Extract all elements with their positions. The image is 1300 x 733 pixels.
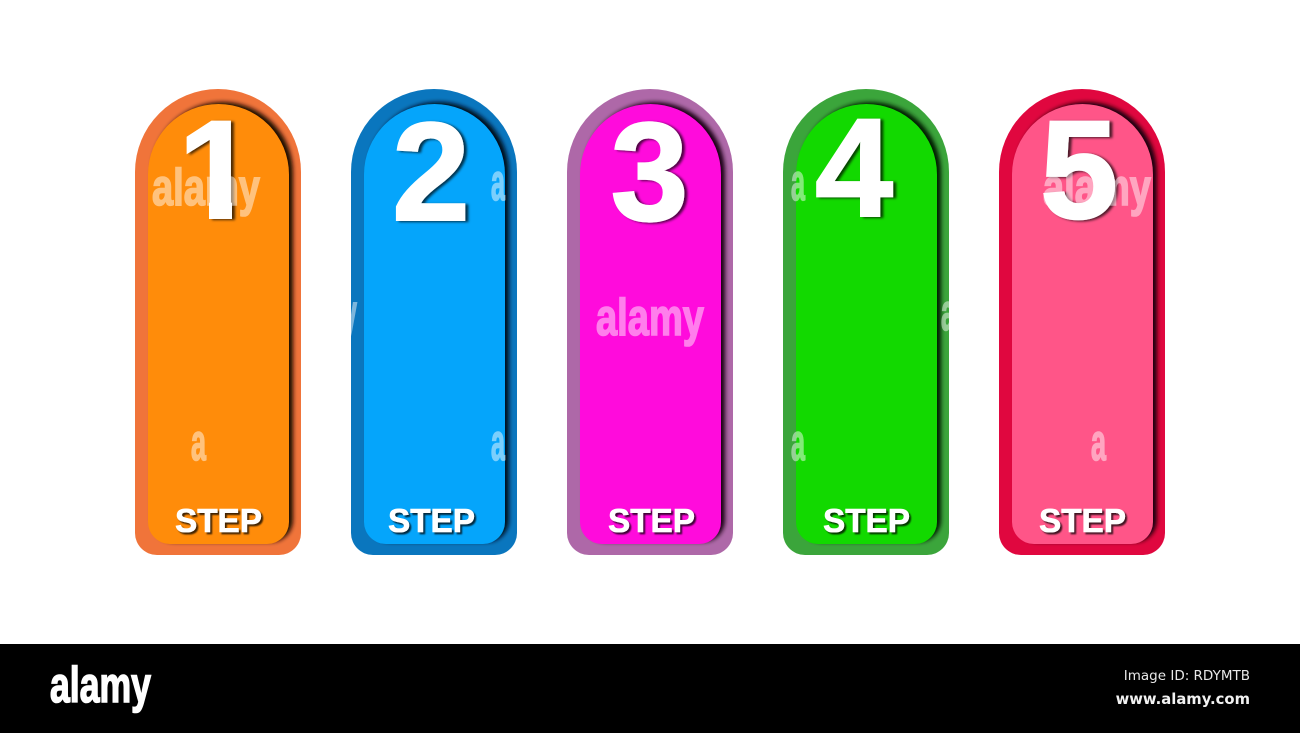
panel: step 2 <box>351 89 517 555</box>
footer logo: alamy <box>50 657 151 713</box>
watermarks: a <box>491 414 506 472</box>
step 1 label: STEP <box>175 502 262 539</box>
step 5 label: STEP <box>1039 502 1126 539</box>
panel: step 4 <box>783 89 949 555</box>
number 2: 2 <box>392 93 470 250</box>
step 2 label: STEP <box>388 502 475 539</box>
step 4 card <box>783 89 949 555</box>
watermarks: a <box>791 414 806 472</box>
step 3 label: STEP <box>608 502 695 539</box>
panel: step 3 <box>567 89 733 555</box>
number 4: 4 <box>815 89 893 246</box>
watermarks: a <box>791 154 806 212</box>
number 3: 3 <box>611 93 688 250</box>
watermarks: alamy <box>152 159 260 217</box>
image id: Image ID: RDYMTB <box>1124 668 1250 684</box>
step 5 card <box>999 89 1165 555</box>
watermarks: a <box>1091 414 1107 472</box>
step 2 card <box>351 89 517 555</box>
watermarks: y <box>343 284 357 342</box>
watermarks: a <box>491 154 506 212</box>
step 4 label: STEP <box>823 502 910 539</box>
watermarks: a <box>941 284 956 342</box>
panel: step 1 <box>135 89 301 555</box>
watermarks: a <box>191 414 207 472</box>
footer bar <box>0 644 1300 733</box>
step 3 card <box>567 89 733 555</box>
number 1: 1 <box>178 91 256 248</box>
number 5: 5 <box>1040 91 1118 248</box>
watermarks: alamy <box>596 289 704 347</box>
watermarks: alamy <box>1043 159 1151 217</box>
watermarks <box>152 154 1151 472</box>
panel: step 5 <box>999 89 1165 555</box>
website: www.alamy.com <box>1116 691 1250 708</box>
step 1 card <box>135 89 301 555</box>
